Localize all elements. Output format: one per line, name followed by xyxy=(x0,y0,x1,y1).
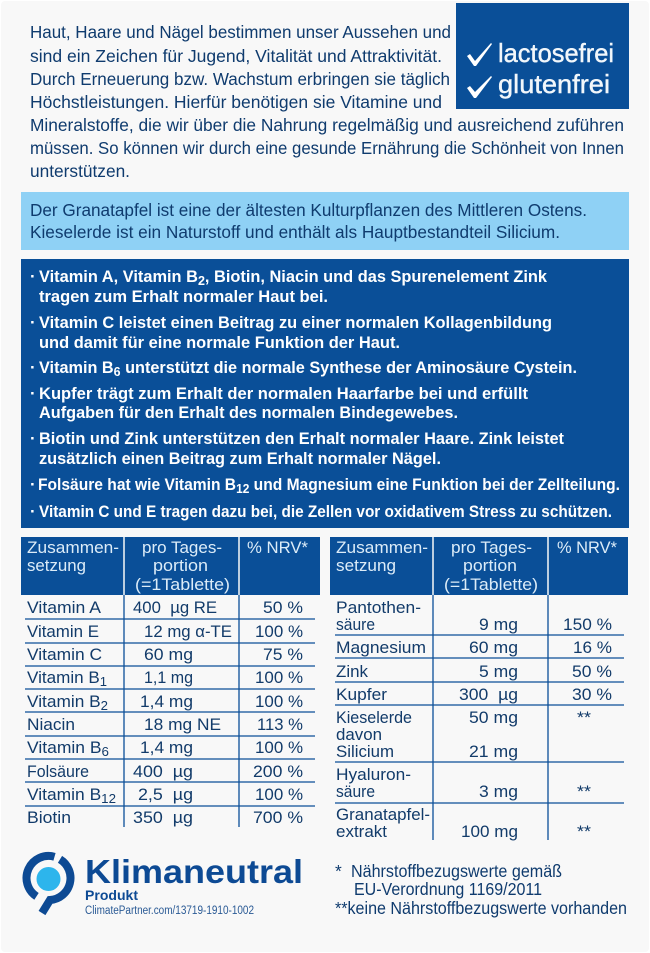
table: composition right: 16 % xyxy=(573,638,612,657)
intro text block: Mineralstoffe, die wir über die Nahrung regelmäßig und ausreichend zuführen xyxy=(30,115,624,135)
table: composition right: 150 % xyxy=(563,615,612,634)
table: composition left: 200 % xyxy=(253,762,303,781)
table: composition right: 3 mg xyxy=(479,782,518,801)
icon: check mark glutenfrei xyxy=(467,76,492,98)
table: composition right: extrakt xyxy=(336,822,387,841)
panel: health claims: · xyxy=(30,358,36,377)
panel: health claims: 6 xyxy=(114,364,121,379)
table: composition left xyxy=(21,537,320,827)
table: composition right: säure xyxy=(336,782,375,801)
table header right: setzung xyxy=(336,556,396,575)
intro text block: unterstützen. xyxy=(30,161,130,181)
table: composition left: 12 xyxy=(101,791,116,806)
panel: health claims: Biotin und Zink unterstützen den Erhalt normaler Haare. Zink leistet xyxy=(39,429,564,448)
intro text block: sind ein Zeichen für Jugend, Vitalität und Attraktivität. xyxy=(30,46,442,66)
table: composition left: 1,1 mg xyxy=(144,668,193,687)
table: composition right: ** xyxy=(577,822,591,841)
table: composition left: 100 % xyxy=(255,692,303,711)
table header left: % NRV* xyxy=(247,538,308,557)
intro text block: Höchstleistungen. Hierfür benötigen sie Vitamine und xyxy=(30,92,442,112)
table: composition right: ** xyxy=(577,782,591,801)
icon: check mark lactosefrei xyxy=(467,43,492,66)
table: composition left: 1 xyxy=(100,674,107,689)
panel: health claims: · xyxy=(30,429,36,448)
table header left xyxy=(21,537,320,595)
table: composition left: 400 µg RE xyxy=(133,598,217,617)
badge: lactosefrei glutenfrei xyxy=(456,3,629,109)
panel: health claims xyxy=(21,259,629,528)
table header left: (=1Tablette) xyxy=(135,575,230,594)
table: composition left: 75 % xyxy=(263,645,303,664)
table: composition left: 2 xyxy=(101,698,108,713)
footnotes: * xyxy=(335,861,342,881)
table header left: portion xyxy=(153,556,208,575)
footnotes: Nährstoffbezugswerte gemäß xyxy=(351,861,562,881)
intro text block: müssen. So können wir durch eine gesunde Ernährung die Schönheit von Innen xyxy=(30,138,624,158)
table: composition left: 50 % xyxy=(263,598,303,617)
table: composition left: Vitamin B xyxy=(27,738,99,757)
table: composition left: Vitamin C xyxy=(27,645,102,664)
table: composition left: 1,4 mg xyxy=(140,692,193,711)
table: composition left: 100 % xyxy=(255,785,303,804)
footnotes: EU-Verordnung 1169/2011 xyxy=(354,879,542,899)
table: composition left: 12 mg α-TE xyxy=(144,622,232,641)
panel: health claims: · xyxy=(30,267,36,286)
table: composition right: davon xyxy=(336,725,382,744)
table header right: (=1Tablette) xyxy=(444,575,538,594)
intro text block xyxy=(30,22,624,181)
badge: lactosefrei glutenfrei: glutenfrei xyxy=(498,69,610,99)
table: composition right: 60 mg xyxy=(469,638,518,657)
table: composition left: 100 % xyxy=(255,668,303,687)
footnotes xyxy=(335,861,627,918)
table: composition left: 1,4 mg xyxy=(140,738,193,757)
icon: climate partner ring xyxy=(27,856,70,913)
table: composition left: Vitamin A xyxy=(27,598,102,617)
table header right: Zusammen- xyxy=(336,538,428,557)
panel: health claims: 2 xyxy=(198,273,205,288)
table header left: Zusammen- xyxy=(27,538,119,557)
table: composition left: Folsäure xyxy=(27,762,89,781)
table: composition right: Magnesium xyxy=(336,638,426,657)
table: composition right: 9 mg xyxy=(479,615,518,634)
panel: Granatapfel and Kieselerde xyxy=(21,192,629,250)
panel: health claims: · xyxy=(30,313,36,332)
table: composition left: 2,5 µg xyxy=(138,785,193,804)
panel: health claims: Kupfer trägt zum Erhalt der normalen Haarfarbe bei und erfüllt xyxy=(39,384,528,403)
panel: health claims: und Magnesium eine Funktion bei der Zellteilung. xyxy=(249,475,620,494)
table header left: pro Tages- xyxy=(142,538,222,557)
table: composition left: 400 µg xyxy=(133,762,193,781)
panel: health claims: Vitamin B xyxy=(39,358,117,377)
table: composition right: Kieselerde xyxy=(336,708,412,727)
table: composition left: 60 mg xyxy=(144,645,193,664)
table: composition right: 50 % xyxy=(572,662,612,681)
table: composition right: 30 % xyxy=(572,685,612,704)
table: composition right: Kupfer xyxy=(336,685,387,704)
intro text block: Haut, Haare und Nägel bestimmen unser Aussehen und xyxy=(30,22,451,42)
logo: Klimaneutral xyxy=(27,853,303,917)
table: composition right: Granatapfel- xyxy=(336,805,430,824)
logo: Klimaneutral: Klimaneutral xyxy=(85,853,303,890)
table header right xyxy=(330,537,628,595)
table: composition right: 100 mg xyxy=(461,822,518,841)
panel: health claims: Vitamin A, Vitamin B xyxy=(39,267,204,286)
table: composition right: Zink xyxy=(336,662,368,681)
panel: health claims: Vitamin C leistet einen Beitrag zu einer normalen Kollagenbildung xyxy=(39,313,552,332)
table: composition left: Biotin xyxy=(27,808,71,827)
panel: Granatapfel and Kieselerde: Der Granatapfel ist eine der ältesten Kulturpflanzen des Mittleren Ostens. xyxy=(30,200,587,220)
panel: health claims: zusätzlich einen Beitrag zum Erhalt normaler Nägel. xyxy=(39,449,441,468)
panel: health claims: unterstützt die normale Synthese der Aminosäure Cystein. xyxy=(121,358,577,377)
panel: health claims: · xyxy=(30,502,36,521)
table: composition left: 113 % xyxy=(257,715,303,734)
table header right: % NRV* xyxy=(557,538,617,557)
panel: health claims: , Biotin, Niacin und das Spurenelement Zink xyxy=(205,267,548,286)
panel: Granatapfel and Kieselerde: Kieselerde ist ein Naturstoff und enthält als Hauptbestandteil Silicium. xyxy=(30,222,560,242)
table: composition left: 100 % xyxy=(255,622,303,641)
table: composition right: säure xyxy=(336,615,375,634)
table: composition right: 300 µg xyxy=(459,685,518,704)
badge: lactosefrei glutenfrei: lactosefrei xyxy=(498,38,614,68)
table header right: portion xyxy=(463,556,517,575)
table header right: pro Tages- xyxy=(451,538,532,557)
panel: health claims: · xyxy=(30,475,36,494)
table: composition right: Hyaluron- xyxy=(336,765,411,784)
table: composition left: Vitamin B xyxy=(27,785,99,804)
table: composition left: Vitamin E xyxy=(27,622,99,641)
logo: Klimaneutral: Produkt xyxy=(85,887,138,903)
table: composition left: 6 xyxy=(102,744,109,759)
table: composition right: 5 mg xyxy=(479,662,518,681)
panel: health claims: Folsäure hat wie Vitamin B xyxy=(38,475,254,494)
panel: health claims: Aufgaben für den Erhalt des normalen Bindegewebes. xyxy=(39,403,458,422)
table: composition right: Pantothen- xyxy=(336,598,421,617)
table: composition left: 350 µg xyxy=(133,808,193,827)
panel: health claims: tragen zum Erhalt normaler Haut bei. xyxy=(39,287,328,306)
table: composition right: ** xyxy=(577,708,591,727)
panel: health claims: 12 xyxy=(236,481,249,496)
table: composition right: Silicium xyxy=(336,742,394,761)
table: composition left: 18 mg NE xyxy=(144,715,221,734)
panel: health claims: und damit für eine normale Funktion der Haut. xyxy=(39,333,400,352)
intro text block: Durch Erneuerung bzw. Wachstum erbringen sie täglich xyxy=(30,69,450,89)
logo: Klimaneutral: ClimatePartner.com/13719-1910-1002 xyxy=(85,905,254,917)
table: composition left: 700 % xyxy=(253,808,303,827)
footnotes: **keine Nährstoffbezugswerte vorhanden xyxy=(335,898,627,918)
table: composition left: Vitamin B xyxy=(27,692,99,711)
table: composition right: 21 mg xyxy=(469,742,518,761)
table: composition left: Vitamin B xyxy=(27,668,99,687)
panel: health claims: · xyxy=(30,384,36,403)
table: composition left: 100 % xyxy=(255,738,303,757)
table header left: setzung xyxy=(27,556,86,575)
table: composition right: 50 mg xyxy=(469,708,518,727)
table: composition right xyxy=(330,537,628,841)
table: composition left: Niacin xyxy=(27,715,75,734)
